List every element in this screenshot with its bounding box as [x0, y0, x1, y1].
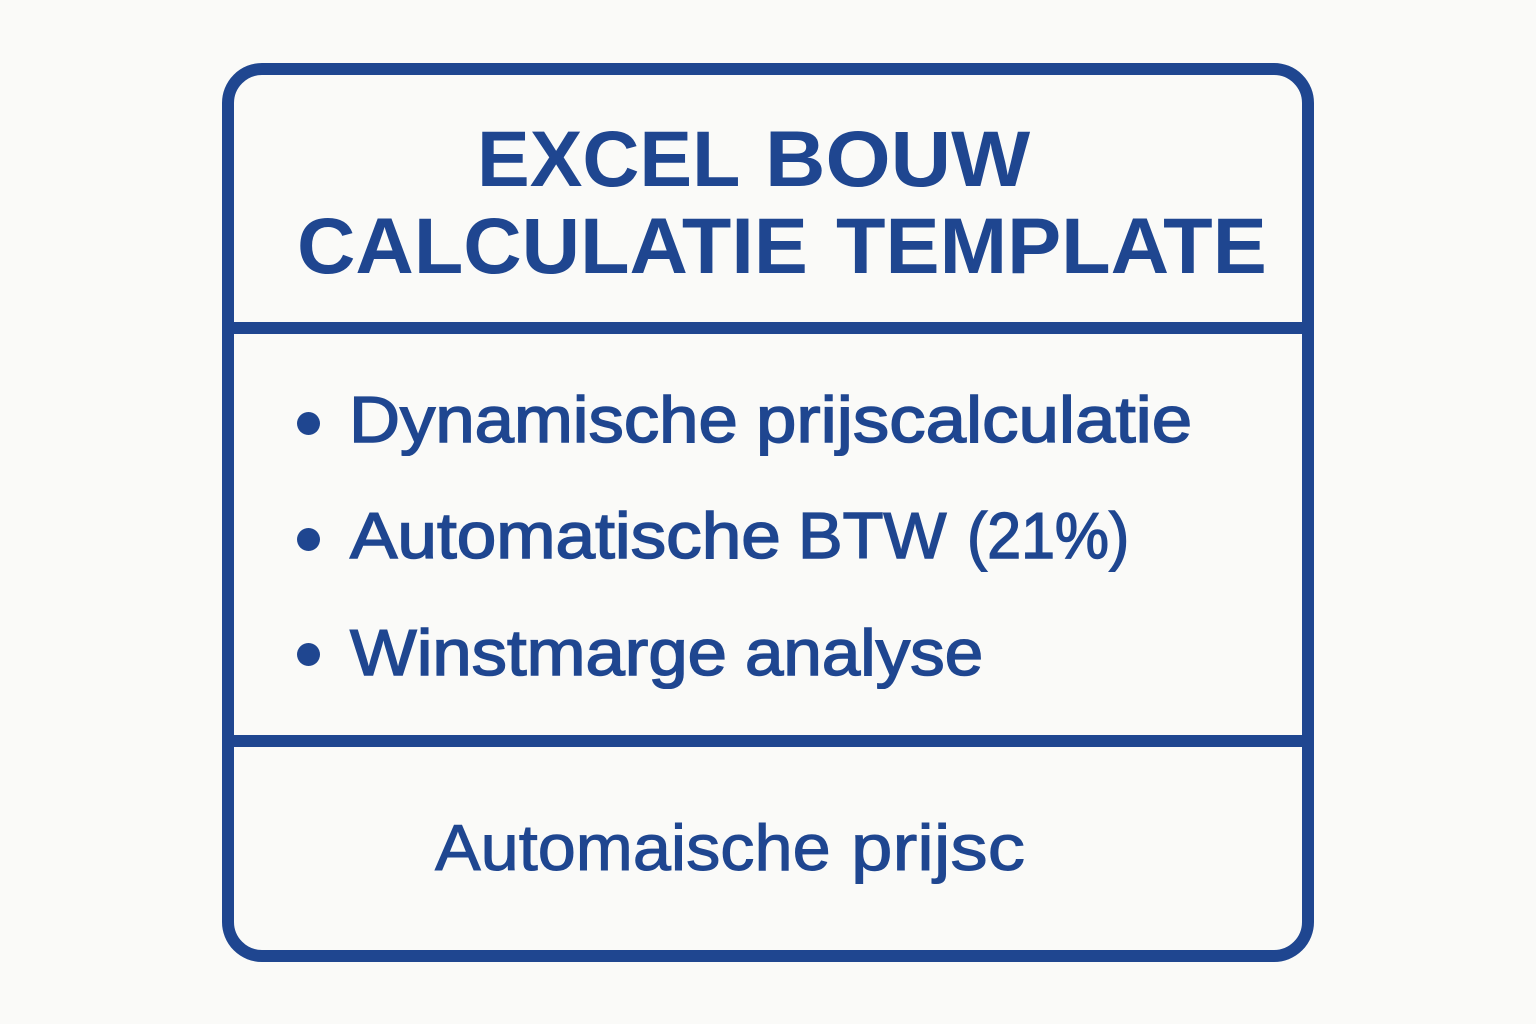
- bullet text 2: Automatische: [350, 499, 781, 572]
- bullet text 2: (21%): [967, 499, 1129, 572]
- footer text: [434, 811, 1025, 884]
- title line 1: [477, 114, 1030, 203]
- footer text: Automaische: [435, 811, 831, 884]
- title line 1: BOUW: [765, 114, 1030, 203]
- divider: header: [228, 322, 1308, 334]
- title line 2: TEMPLATE: [836, 201, 1267, 290]
- bullet text 1: Dynamische: [349, 383, 738, 456]
- title line 2: [297, 201, 1267, 290]
- bullet text 2: [349, 499, 1129, 572]
- title line 1: EXCEL: [477, 114, 740, 203]
- divider: footer: [228, 735, 1308, 747]
- footer text: prijsc: [851, 811, 1025, 884]
- bullet text 3: Winstmarge: [350, 616, 727, 689]
- card frame: [222, 63, 1314, 962]
- bullet text 3: [349, 616, 983, 689]
- bullet text 2: BTW: [798, 499, 946, 572]
- title line 2: CALCULATIE: [297, 201, 808, 290]
- bullet text 1: [349, 383, 1192, 456]
- bullet dot 3: [297, 643, 320, 666]
- bullet dot 1: [297, 412, 320, 435]
- bullet text 3: analyse: [745, 616, 983, 689]
- bullet dot 2: [297, 528, 320, 551]
- bullet text 1: prijscalculatie: [756, 383, 1192, 456]
